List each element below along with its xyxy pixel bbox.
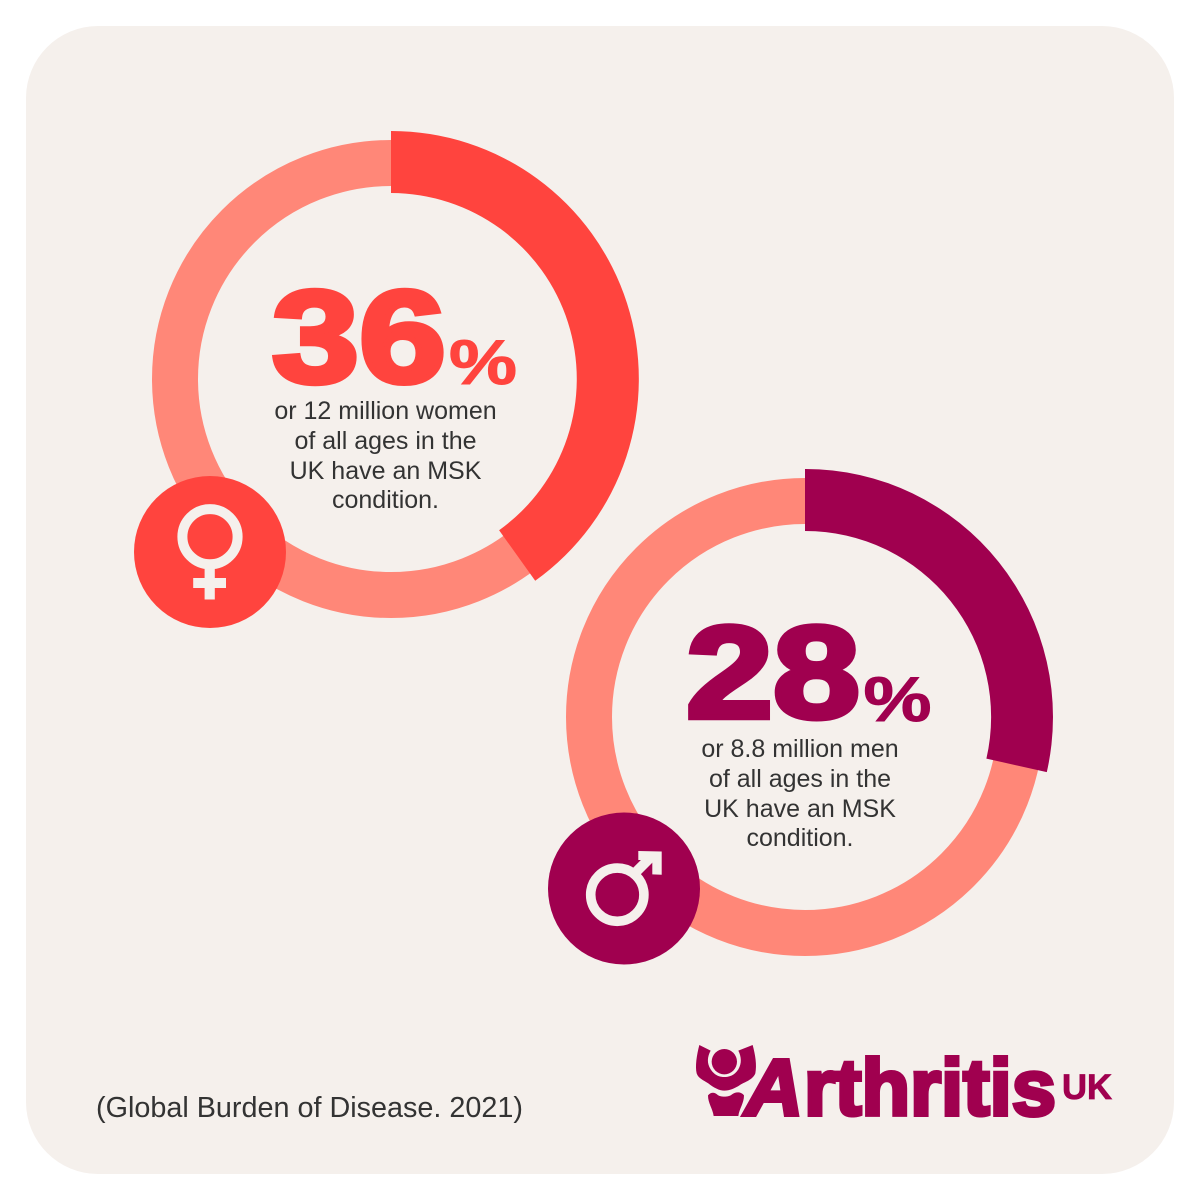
- text: men description: condition.: [746, 824, 854, 852]
- heading: 36 percent: %: [449, 328, 517, 398]
- logo: Arthritis UK: [696, 1043, 1112, 1132]
- text: women description: of all ages in the: [294, 427, 477, 455]
- chart: women donut segment: [391, 131, 639, 581]
- text: logo wordmark: A: [743, 1043, 803, 1132]
- text: logo UK: UK: [1062, 1068, 1112, 1107]
- text: logo wordmark continued: rthritis: [804, 1043, 1056, 1132]
- panel: women statistic: [134, 131, 639, 628]
- text: men description: UK have an MSK: [704, 795, 896, 823]
- chart: women donut track: [175, 163, 607, 595]
- heading: 36 percent: 36: [272, 263, 446, 410]
- text: women description: UK have an MSK: [290, 457, 482, 485]
- text: men description: or 8.8 million men: [701, 735, 899, 763]
- icon: logo figure: [696, 1045, 756, 1116]
- text: source citation: (Global Burden of Disease. 2021): [96, 1092, 523, 1124]
- heading: 28 percent: 28: [686, 598, 860, 746]
- icon: male symbol: [548, 812, 700, 964]
- text: women description: or 12 million women: [274, 397, 497, 425]
- panel: men statistic: [548, 469, 1053, 964]
- chart: men donut track: [589, 501, 1021, 933]
- icon: female symbol: [134, 476, 286, 628]
- heading: 28 percent: [686, 598, 932, 746]
- chart: men donut segment: [805, 469, 1053, 772]
- heading: 36 percent: [272, 263, 517, 410]
- heading: 28 percent: %: [864, 665, 932, 735]
- text: men description: of all ages in the: [709, 765, 891, 793]
- text: women description: condition.: [332, 486, 439, 514]
